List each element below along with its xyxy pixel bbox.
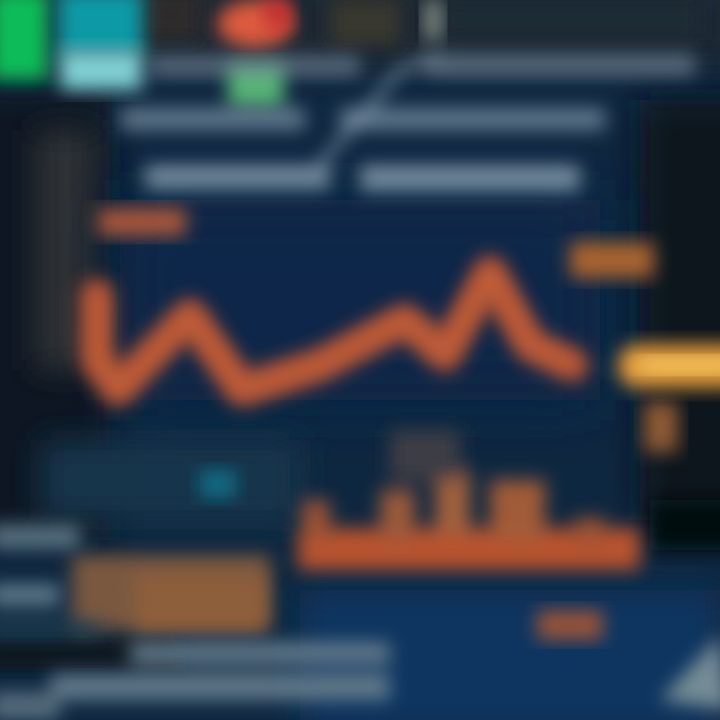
panel: grey-blue streaks lower left: [0, 525, 390, 720]
title: [120, 54, 695, 191]
heading: right label: [570, 242, 654, 278]
legend label: [537, 610, 603, 640]
heading: left label: [98, 208, 186, 236]
icon: red and green top marks: [217, 0, 442, 107]
bar chart: [298, 430, 640, 570]
icon: green and teal colour blocks: [0, 0, 143, 90]
icon: light shape lower right: [660, 635, 720, 710]
icon: small teal mark: [200, 470, 236, 498]
line chart: [97, 272, 572, 390]
panel: tan box lower left: [72, 555, 270, 630]
callout: yellow bar: [618, 344, 720, 452]
